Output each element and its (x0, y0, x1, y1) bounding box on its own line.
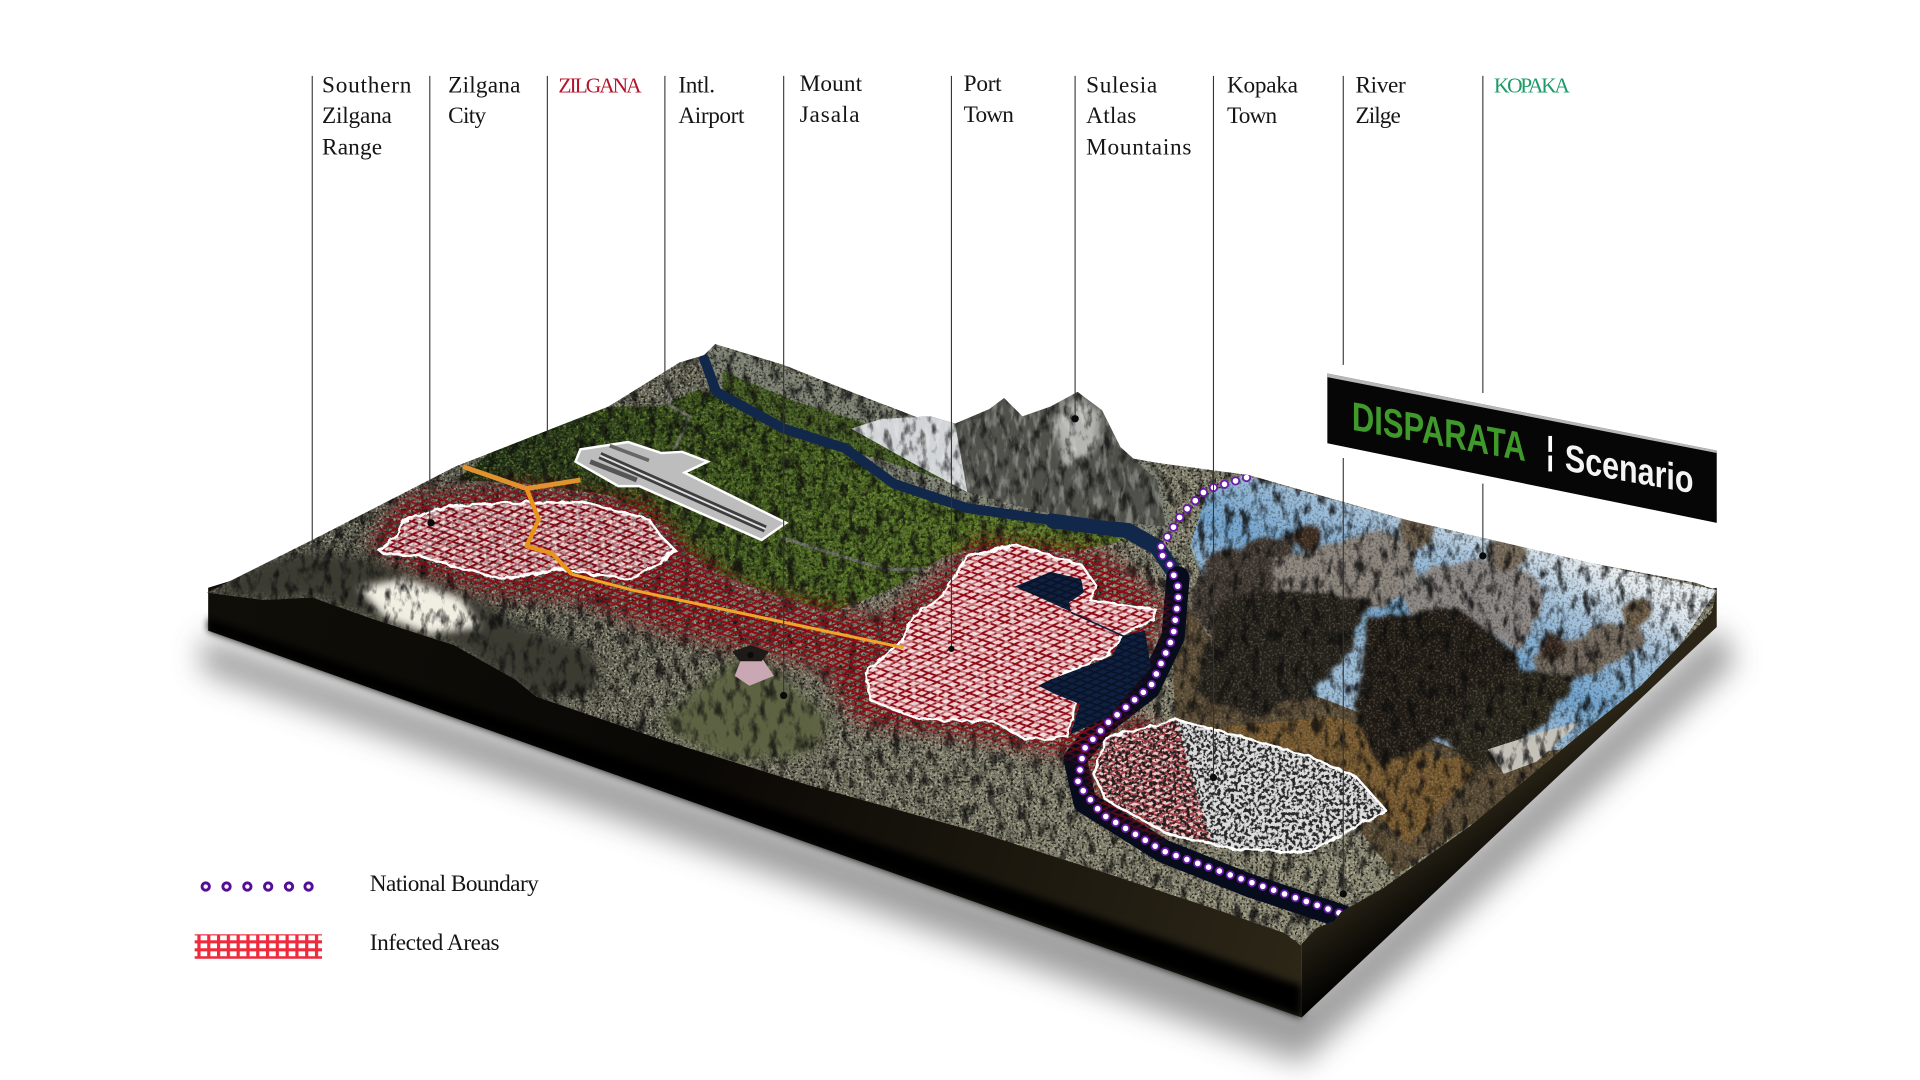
label: Kopaka Town: Kopaka (1227, 72, 1298, 98)
label: ZILGANA: ZILGANA (558, 73, 642, 97)
river (704, 359, 1341, 916)
photo sky (1190, 476, 1716, 751)
label: River Zilge: Zilge (1356, 103, 1401, 129)
terrain surface (207, 344, 1717, 945)
sky and soldiers photo (214, 344, 1716, 945)
soldier figures (1190, 512, 1653, 771)
label: Sulesia Atlas Mountains: Sulesia (1086, 72, 1157, 98)
port town (864, 544, 1158, 742)
label: Zilgana City (448, 72, 520, 129)
zilgana city (376, 499, 678, 580)
label: Southern Zilgana Range (322, 72, 412, 160)
label: Mount Jasala (800, 71, 863, 128)
left mountain range (208, 539, 612, 710)
leader line anchor dots (427, 415, 1487, 898)
photo ground (1173, 604, 1572, 876)
label: KOPAKA: KOPAKA (1494, 73, 1570, 97)
sulesia atlas mountains (851, 392, 1166, 526)
infected area hatch (361, 472, 1178, 845)
infographic: disparata scenario 3D map (186, 76, 1748, 1076)
legend: infected areas (195, 930, 500, 959)
leader lines (312, 76, 1483, 894)
label: Kopaka Town (1227, 72, 1298, 129)
label: Southern Zilgana Range: Southern (322, 72, 412, 98)
banner: Disparata Scenario: Scenario (1565, 436, 1693, 502)
label: Mount Jasala: Jasala (800, 102, 860, 128)
north bank strip (707, 344, 1175, 538)
label: Kopaka Town: Town (1227, 103, 1278, 129)
label: Sulesia Atlas Mountains: Atlas (1086, 103, 1136, 129)
slab drop shadow (202, 627, 1736, 1063)
label: Southern Zilgana Range: Zilgana (322, 103, 392, 129)
volcano (658, 645, 836, 766)
label: Intl. Airport: Intl. (678, 72, 715, 98)
slab side faces (208, 539, 1717, 1018)
legend: national boundary: National Boundary (370, 871, 539, 897)
brown grass (1206, 716, 1494, 845)
label: Intl. Airport (678, 72, 745, 129)
legend: infected areas: Infected Areas (370, 930, 500, 956)
national boundary dotted line (1078, 478, 1341, 913)
label: Sulesia Atlas Mountains: Mountains (1086, 134, 1191, 160)
label: Zilgana City: Zilgana (448, 72, 520, 98)
label: Mount Jasala: Mount (800, 71, 863, 97)
label: Sulesia Atlas Mountains (1086, 72, 1191, 160)
port bay water (1015, 572, 1151, 735)
label: Port Town (964, 71, 1014, 128)
banner: Disparata Scenario (1327, 373, 1717, 523)
label: Port Town: Port (964, 71, 1002, 97)
label: River Zilge (1356, 72, 1406, 129)
label: Intl. Airport: Airport (678, 103, 745, 129)
forest (456, 390, 1128, 612)
banner: Disparata Scenario: DISPARATA (1352, 393, 1526, 470)
label: Southern Zilgana Range: Range (322, 134, 382, 160)
airport (576, 442, 786, 540)
lower right snow edge (1488, 722, 1580, 774)
label: Zilgana City: City (448, 103, 486, 129)
kopaka town (1092, 717, 1388, 854)
label: River Zilge: River (1356, 72, 1406, 98)
legend: national boundary (202, 871, 539, 897)
photo grain (1169, 465, 1720, 894)
gray access roads (667, 367, 924, 569)
label: Port Town: Town (964, 102, 1014, 128)
orange roads (463, 467, 904, 648)
